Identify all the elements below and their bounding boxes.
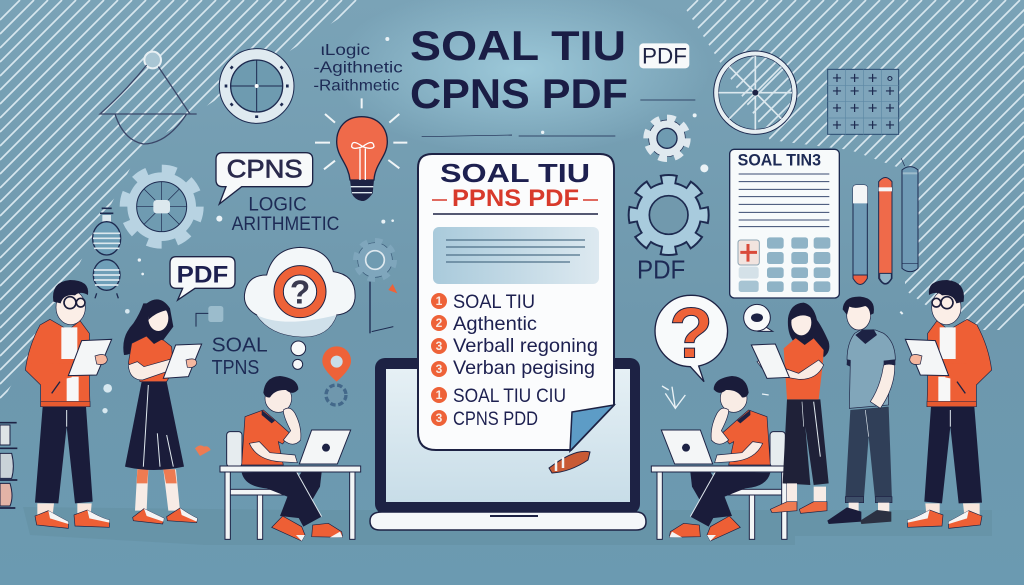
numbered list	[431, 292, 598, 430]
icon: math grid	[828, 68, 899, 135]
icon: stack of books	[0, 423, 17, 508]
icon: small gear	[356, 241, 394, 333]
text: soal tpns: TPNS	[212, 357, 259, 379]
small accents	[102, 284, 397, 456]
person: student with jacket and tablet	[905, 280, 992, 528]
icon: math grid: ∘	[885, 68, 895, 87]
title: CPNS PDF	[410, 70, 628, 117]
callout: question mark bubble	[655, 293, 728, 382]
heading: document title	[432, 158, 598, 214]
callout: PDF speech bubble: PDF	[177, 262, 228, 289]
icon: math grid: +	[850, 68, 860, 87]
bottom left scene	[0, 247, 397, 541]
sparkles	[662, 312, 903, 408]
heading: document title: SOAL TIU	[440, 158, 590, 188]
person: seated student	[651, 376, 792, 541]
bottom right scene	[651, 280, 992, 541]
callout: thought cloud with question mark	[244, 247, 355, 369]
text: PDF label: PDF	[637, 254, 685, 284]
title: SOAL TIU	[410, 22, 626, 69]
person: boy with hands in pockets	[827, 297, 895, 524]
icon: math grid: +	[850, 116, 860, 135]
icon: math grid: +	[832, 68, 842, 87]
icon: wheel	[714, 51, 797, 134]
text: logic arithmetic	[232, 194, 339, 235]
icon: large light gear	[126, 171, 198, 243]
title	[410, 22, 628, 117]
icon: math grid: +	[885, 98, 895, 117]
numbered list: SOAL TIU	[453, 292, 535, 313]
text: logic list: -Agithnetic	[313, 59, 403, 76]
icon: math grid: +	[885, 82, 895, 101]
person: girl with tablet	[751, 303, 829, 513]
icon: folded corner	[570, 405, 614, 451]
callout: small bubble	[744, 304, 773, 331]
numbered list: 1	[436, 294, 443, 308]
summary box	[433, 227, 599, 284]
icon: geometry pendulum	[100, 52, 197, 144]
text: logic list: ιLogic	[321, 42, 370, 59]
icon: math grid: +	[832, 98, 842, 117]
panel: worksheet with calculator	[730, 149, 839, 298]
icon: math grid: +	[868, 82, 878, 101]
numbered list: Verball regoning	[453, 336, 598, 357]
person: student at desk	[220, 376, 361, 541]
person: girl with paper	[123, 299, 202, 524]
callout: CPNS speech bubble	[216, 153, 313, 204]
text: logic list	[313, 42, 403, 94]
callout: CPNS speech bubble: CPNS	[227, 157, 303, 184]
icon: pens and tubes	[853, 158, 918, 284]
numbered list: 2	[436, 316, 443, 330]
icon: small white gear	[647, 118, 687, 158]
icon: dial	[219, 49, 294, 123]
top right icons	[519, 43, 918, 298]
diagonal stripes right	[680, 0, 1024, 340]
numbered list: Verban pegising	[453, 358, 595, 379]
numbered list: Agthentic	[453, 314, 537, 335]
callout: thought cloud with question mark: ?	[290, 274, 310, 311]
numbered list: 3	[436, 339, 443, 353]
callout: question mark bubble: ?	[669, 293, 713, 373]
numbered list: 3	[436, 411, 443, 425]
person: student with glasses and tablet	[25, 280, 112, 528]
text: soal tpns	[212, 335, 268, 379]
text: soal tpns: SOAL	[212, 335, 268, 357]
callout: PDF speech bubble	[170, 257, 235, 300]
text: logic arithmetic: ARITHMETIC	[232, 214, 339, 235]
text: logic arithmetic: LOGIC	[248, 194, 307, 215]
icon: math grid: +	[868, 98, 878, 117]
heading: document title: PPNS PDF	[452, 185, 579, 212]
decorative sparkles	[138, 37, 394, 275]
icon: math grid: +	[832, 82, 842, 101]
icon: math grid: +	[850, 82, 860, 101]
panel: worksheet with calculator: SOAL TIN3	[738, 151, 821, 170]
top left icons	[93, 37, 512, 333]
diagonal stripes left	[0, 0, 356, 398]
floor	[23, 507, 992, 545]
decorative dashes	[519, 100, 708, 172]
icon: math grid: +	[868, 116, 878, 135]
text: logic list: -Raithmetic	[313, 77, 399, 94]
numbered list: 3	[436, 362, 443, 376]
numbered list: 1	[436, 388, 443, 402]
laptop	[370, 358, 646, 530]
icon: location pin	[322, 346, 351, 405]
numbered list: CPNS PDD	[453, 409, 538, 430]
icon: math grid: +	[868, 68, 878, 87]
numbered list: SOAL TIU CIU	[453, 386, 566, 407]
panel: document	[418, 154, 614, 451]
icon: dna capsule	[93, 208, 121, 298]
icon: math grid: +	[850, 98, 860, 117]
icon: light bulb	[315, 98, 407, 201]
icon: math grid: +	[832, 116, 842, 135]
icon: big outlined gear	[633, 180, 704, 250]
callout: PDF label: PDF	[642, 43, 687, 68]
icon: math grid: +	[885, 116, 895, 135]
